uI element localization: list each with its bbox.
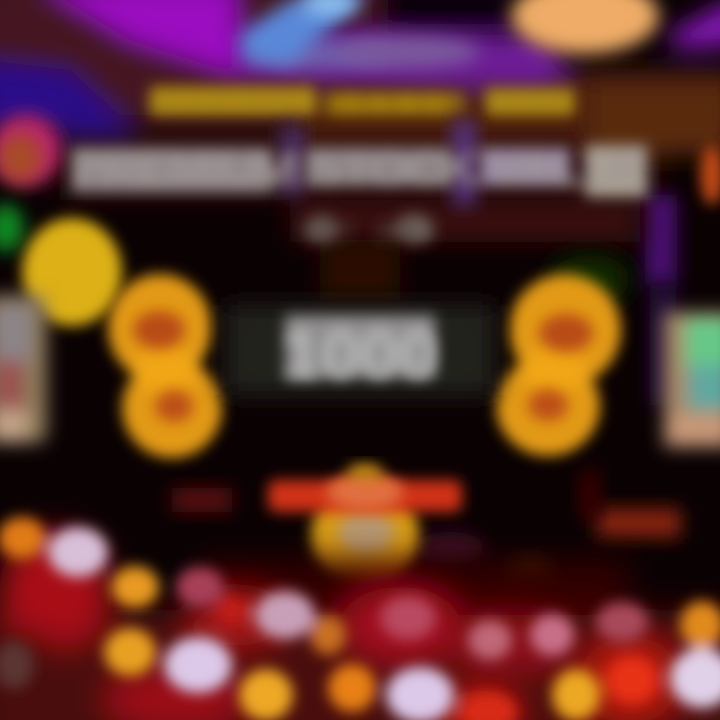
casino chairs row: [0, 517, 720, 720]
badge: jackpot emblem: [172, 464, 681, 598]
panel: center value: [225, 305, 495, 395]
icon: yellow coin: [22, 218, 122, 326]
heading: white title: PREMIUM STOCK VALUE: [70, 141, 650, 197]
icon: left coin stack: [108, 274, 222, 458]
heading: white title: [70, 120, 650, 205]
side glows: [0, 114, 720, 405]
ceiling lights: [0, 0, 720, 200]
panel: center value: 1000: [282, 315, 438, 393]
icon: right coin stack: [496, 274, 621, 456]
subheading: 777 BET: [300, 216, 440, 246]
panel: left card: [0, 295, 47, 443]
panel: right card: [664, 312, 720, 447]
heading: yellow title: PREMIUM GAMES 2024: [148, 88, 572, 118]
